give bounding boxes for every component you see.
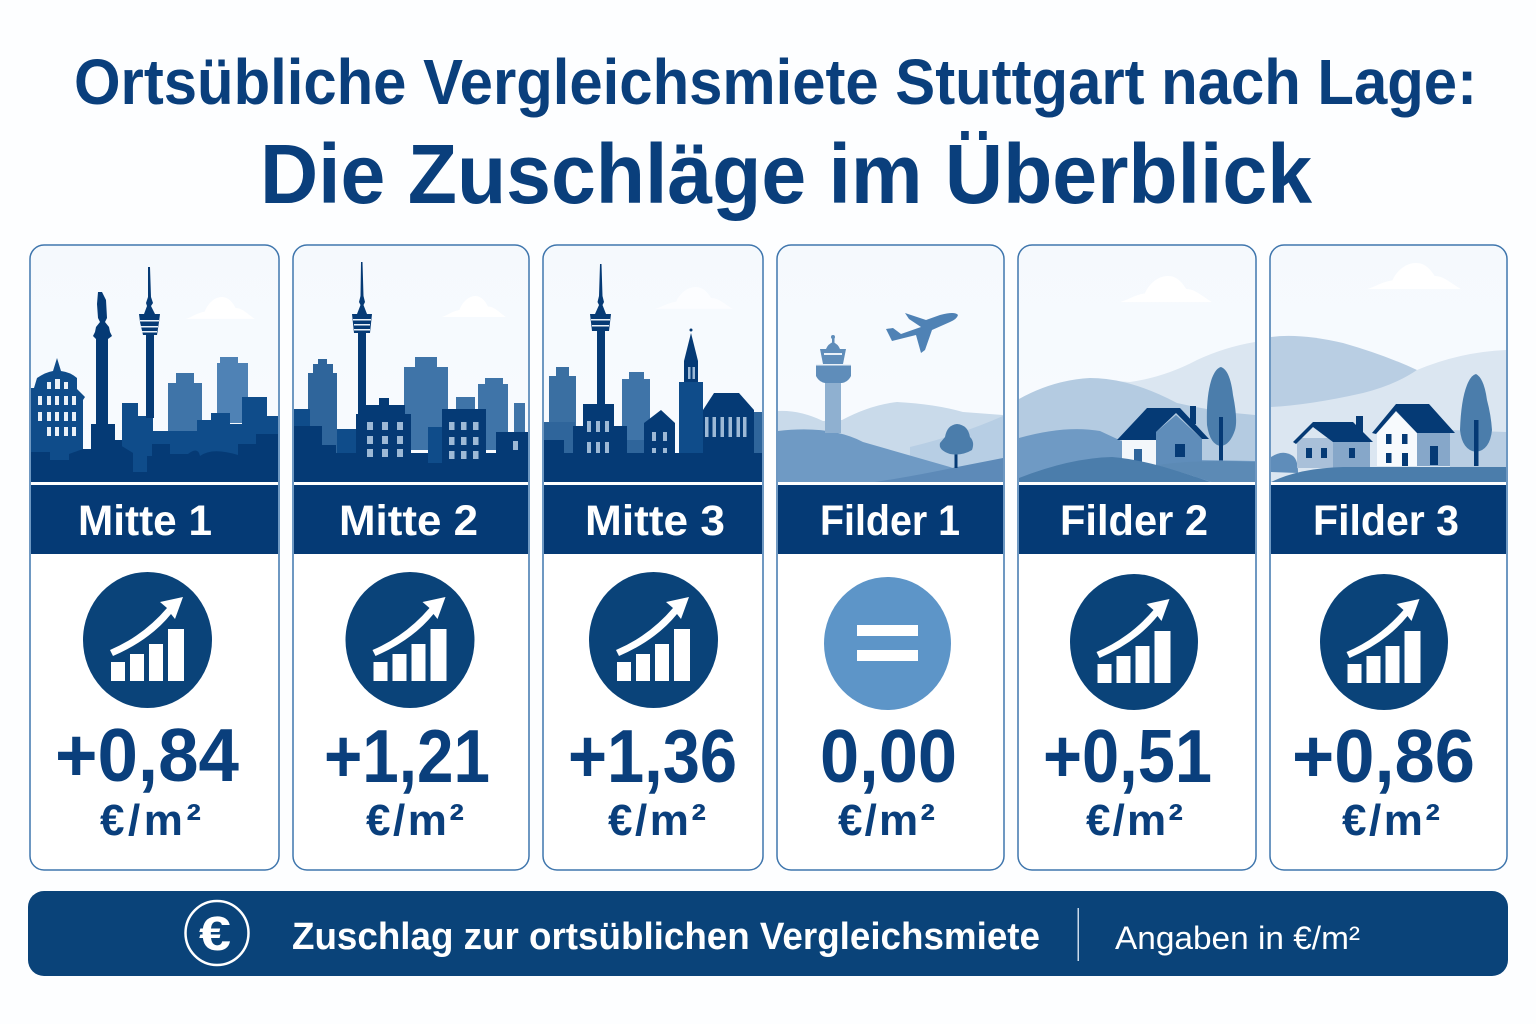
value: +0,86: +0,86 bbox=[1292, 714, 1475, 798]
skyline illustration: Mitte 2 bbox=[294, 246, 528, 482]
house bbox=[1117, 406, 1209, 472]
icon: equals sign bbox=[824, 577, 951, 710]
panel: Filder 1 bbox=[777, 245, 1004, 870]
value: +0,51: +0,51 bbox=[1043, 714, 1212, 798]
unit: €/m² bbox=[366, 796, 464, 845]
panel: Filder 3 bbox=[1270, 245, 1507, 870]
panel: Mitte 3 bbox=[543, 245, 763, 870]
label: Filder 3: Filder 3 bbox=[1313, 497, 1459, 545]
skyline illustration: Mitte 1 bbox=[31, 246, 278, 482]
panel: Mitte 2 bbox=[293, 245, 529, 870]
label: Filder 2: Filder 2 bbox=[1060, 497, 1208, 545]
icon: euro coin bbox=[186, 901, 248, 965]
village landscape illustration: Filder 2 bbox=[1019, 246, 1255, 482]
unit: €/m² bbox=[608, 796, 706, 845]
footer bar bbox=[28, 891, 1508, 976]
icon: rising bar chart bbox=[589, 572, 718, 708]
label: Mitte 1: Mitte 1 bbox=[78, 497, 212, 545]
tree bbox=[1207, 367, 1236, 461]
icon: rising bar chart bbox=[83, 572, 212, 708]
left house bbox=[1293, 416, 1373, 468]
tree bbox=[1460, 374, 1492, 466]
panel: Mitte 1 bbox=[30, 245, 279, 870]
tree bbox=[940, 424, 973, 468]
title line 2: Die Zuschläge im Überblick bbox=[260, 127, 1312, 221]
label: Filder 1: Filder 1 bbox=[820, 497, 960, 545]
right house bbox=[1372, 404, 1455, 466]
title line 1: Ortsübliche Vergleichsmiete Stuttgart nach Lage: bbox=[74, 46, 1477, 118]
header band: Mitte 2 bbox=[294, 485, 528, 554]
panel: Filder 2 bbox=[1018, 245, 1256, 870]
header band: Filder 3 bbox=[1271, 485, 1506, 554]
icon: airplane bbox=[886, 313, 958, 353]
label: Mitte 3: Mitte 3 bbox=[585, 497, 725, 545]
control tower bbox=[816, 335, 851, 433]
unit: €/m² bbox=[1342, 796, 1440, 845]
unit: €/m² bbox=[1086, 796, 1183, 845]
label: Mitte 2: Mitte 2 bbox=[339, 497, 478, 545]
airport landscape illustration: Filder 1 bbox=[778, 246, 1003, 482]
icon: euro coin: € bbox=[199, 908, 231, 961]
value: +1,36: +1,36 bbox=[568, 714, 737, 798]
icon: rising bar chart bbox=[346, 572, 474, 708]
footer label: Zuschlag zur ortsüblichen Vergleichsmiete bbox=[292, 916, 1040, 958]
unit: €/m² bbox=[100, 796, 201, 845]
header band: Filder 1 bbox=[778, 485, 1003, 554]
value: 0,00: 0,00 bbox=[820, 714, 957, 798]
icon: rising bar chart bbox=[1070, 574, 1198, 710]
footer unit note: Angaben in €/m² bbox=[1115, 920, 1360, 956]
header band: Mitte 1 bbox=[31, 485, 278, 554]
bush bbox=[1271, 453, 1298, 473]
icon: rising bar chart bbox=[1320, 574, 1448, 710]
header band: Mitte 3 bbox=[544, 485, 762, 554]
header band: Filder 2 bbox=[1019, 485, 1255, 554]
village landscape illustration: Filder 3 bbox=[1271, 246, 1506, 482]
value: +1,21: +1,21 bbox=[324, 714, 490, 798]
value: +0,84: +0,84 bbox=[55, 713, 239, 797]
skyline illustration: Mitte 3 bbox=[544, 246, 762, 482]
unit: €/m² bbox=[838, 796, 935, 845]
